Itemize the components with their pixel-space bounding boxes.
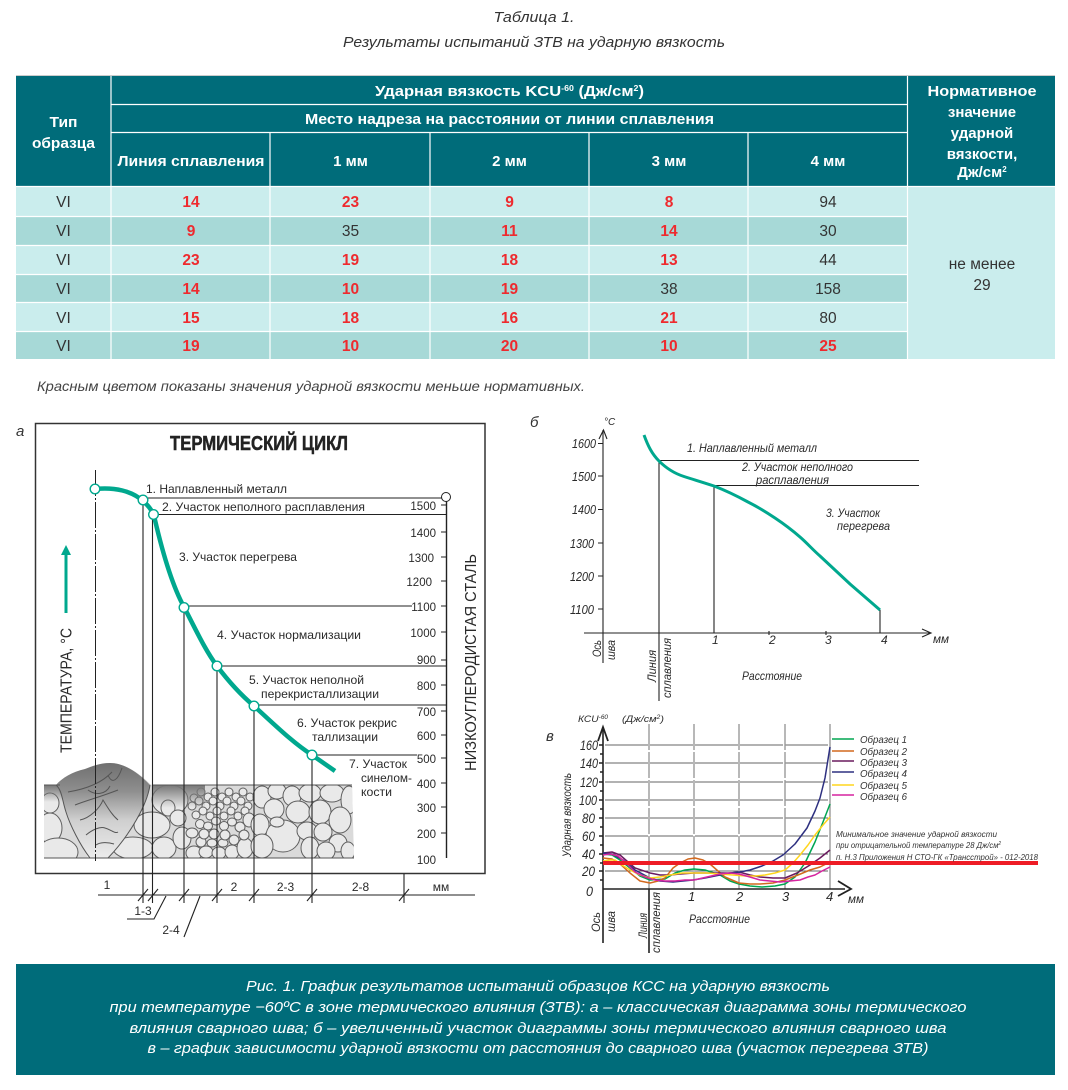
table header: вязкости, [947,146,1017,163]
zone labels: 7. Участок [349,757,408,771]
axis titles: сплавления [649,891,663,953]
table data rows: 8 [665,194,674,211]
table data rows: 10 [342,338,359,355]
table data rows: 16 [501,310,518,327]
temperature scale: 1400 [410,528,436,540]
axis titles: 2 [655,715,661,721]
temperature scale: 1300 [408,553,434,565]
table data rows: 23 [182,252,200,269]
table data rows: 25 [819,338,837,355]
table header: значение [948,104,1016,121]
table data rows: 10 [660,338,678,355]
table data rows: 14 [660,223,678,240]
grid [603,724,830,889]
y tick labels: 60 [582,828,595,844]
caption banner: Рис. 1. График результатов испытаний образцов КСС на ударную вязкость [246,978,830,995]
zone labels: 5. Участок неполной [249,673,364,687]
axis titles: Линия [636,913,650,939]
axis rotated labels: Ось [590,640,604,657]
axis titles: КСU [578,714,597,725]
table header: 2 мм [492,153,527,170]
axis tick labels: 1 [712,633,719,647]
sample 6 [603,854,830,882]
legend: Образец 2 [860,746,907,758]
table header: 2 [1002,165,1007,174]
curve markers [90,484,450,760]
table data rows: 20 [501,338,518,355]
axis arrows [598,727,851,896]
table data rows: VI [56,223,71,240]
temperature scale: 1200 [406,577,432,589]
axis titles: (Дж/см [622,714,652,725]
caption banner: при температуре −60ºС в зоне термического влияния (ЗТВ): а – классическая диаграмма зоны термического [110,999,966,1016]
series curves [603,747,830,887]
zone labels: таллизации [312,730,378,744]
table data rows: не менее [949,256,1015,273]
table header: образца [32,135,96,152]
minimum value note: при отрицательной температуре 28 Дж/см [836,840,1016,850]
table data rows: VI [56,310,71,327]
zone labels: 6. Участок рекрис [297,716,397,730]
table header: Дж/см [957,164,1002,181]
temperature axis label: ТЕМПЕРАТУРА, °С [58,628,76,753]
table data rows: 19 [182,338,200,355]
panel frame [36,424,485,874]
dimension line: мм [433,880,449,894]
minimum value note: Минимальное значение ударной вязкости [836,829,997,839]
table header: 4 мм [811,153,845,170]
table header: Место надреза на расстоянии от линии сплавления [305,111,714,128]
axis titles: мм [848,892,864,906]
zone labels: Расстояние [742,669,802,683]
weld centre axis [94,470,96,861]
temperature scale: 1000 [410,628,436,640]
table data rows: 13 [660,252,678,269]
axis titles: 2 [735,889,744,904]
table header: Ударная вязкость KCU [375,83,544,100]
zone labels: синелом- [361,771,412,785]
y tick labels: 140 [580,755,598,771]
table data rows [56,194,1015,355]
dimension line: 2-8 [352,880,369,894]
table data rows: 18 [501,252,518,269]
y tick labels: 160 [580,737,598,753]
table header: 2 [634,84,639,93]
y tick labels [579,737,598,899]
table header: (Дж/см [574,83,634,100]
panel a: thermal cycle diagram [16,423,485,937]
table data rows: 30 [819,223,837,240]
axis titles: 3 [782,889,790,904]
axis tick labels [570,417,949,647]
dimension line: 1 [104,878,111,892]
zone labels: 3. Участок перегрева [179,550,297,564]
axes and guide lines [584,430,931,701]
axis rotated labels: Линия [645,649,659,683]
low-carbon steel label: НИЗКОУГЛЕРОДИСТАЯ СТАЛЬ [463,554,480,771]
legend: Образец 1 [860,734,907,746]
zone labels: кости [361,785,392,799]
legend: Образец 4 [860,768,907,780]
minimum value note [836,829,1038,862]
zone labels: 2. Участок неполного [741,460,853,474]
table data rows: 14 [182,281,200,298]
axis titles: Ось [589,912,603,932]
table note: Красным цветом показаны значения ударной вязкости меньше нормативных. [37,378,585,394]
zone labels: расплавления [755,473,830,487]
table header [32,83,1036,181]
dimension line: 2 [231,880,238,894]
temperature scale: 700 [417,707,436,719]
table data rows: 38 [660,281,678,298]
temperature scale [406,501,436,867]
legend [832,734,907,803]
zone labels: 1. Наплавленный металл [687,441,817,455]
table header: ударной [951,125,1013,142]
axis tick labels: 1600 [572,436,597,451]
title [343,9,725,51]
table data rows: 9 [505,194,514,211]
table data rows: 19 [501,281,518,298]
table data rows: VI [56,338,71,355]
table header: Тип [50,114,78,131]
axis rotated labels: шва [604,640,618,660]
table header: 3 мм [652,153,686,170]
axis tick labels: °C [604,417,616,428]
table data rows: 35 [342,223,359,240]
temperature scale: 1500 [410,501,436,513]
zone labels [687,441,890,683]
zone labels: перегрева [837,519,890,533]
temperature scale: 500 [417,754,436,766]
temperature scale: 900 [417,655,436,667]
zone labels: 4. Участок нормализации [217,628,361,642]
axis titles [560,714,864,953]
axis tick labels: 1100 [570,602,595,617]
sample 1 [603,804,830,887]
minimum value note: п. Н.3 Приложения Н СТО-ГК «Трансстрой» - 012-2018 [836,852,1038,862]
axis tick labels: 1300 [570,536,595,551]
temperature curve [644,435,880,610]
table header: 1 мм [333,153,368,170]
temperature scale: 1100 [411,602,436,614]
legend: Образец 3 [860,757,907,769]
y tick labels: 20 [581,863,595,879]
axis tick labels: 2 [768,633,776,647]
zone labels: 1. Наплавленный металл [146,482,287,496]
microstructure band [38,763,357,866]
table data rows: 15 [182,310,200,327]
y tick labels: 0 [586,883,593,899]
sample 3 [603,850,830,878]
axis tick labels: 4 [881,633,888,647]
panel letter v: в [546,728,554,745]
thermal curve [95,488,335,771]
axis titles: Расстояние [689,912,750,926]
sample 2 [603,858,830,884]
table header: Линия сплавления [118,153,264,170]
temperature scale: 100 [417,855,436,867]
axis titles: Ударная вязкость [560,773,574,858]
table header: -60 [561,84,575,93]
axis tick labels: 1500 [572,469,597,484]
zone labels: перекристаллизации [261,687,379,701]
table data rows: VI [56,252,71,269]
sample 4 [603,747,830,882]
table data rows: VI [56,194,71,211]
table data rows: 94 [819,194,837,211]
table header: Нормативное [928,83,1036,100]
table data rows: 19 [342,252,359,269]
dimension line: 2-4 [162,923,180,937]
table data rows: 10 [342,281,359,298]
dimension line: 2-3 [277,880,294,894]
axis tick labels: 1200 [570,569,595,584]
table data rows: 80 [819,310,837,327]
title: Таблица 1. [494,9,574,26]
caption banner: в – график зависимости ударной вязкости от расстояния до сварного шва (участок перегрева ЗТВ) [148,1040,928,1057]
panel heading: ТЕРМИЧЕСКИЙ ЦИКЛ [170,431,348,455]
dimension line: 1-3 [134,904,152,918]
table data rows: VI [56,281,71,298]
axis rotated labels [590,637,674,698]
axis titles: ) [659,714,664,725]
zone labels: 2. Участок неполного расплавления [162,500,365,514]
minimum value note: 2 [998,841,1001,847]
axis tick labels: 3 [825,633,832,647]
title: Результаты испытаний ЗТВ на ударную вязкость [343,34,725,51]
panel b: temperature vs distance chart [530,414,949,701]
table data rows: 21 [660,310,678,327]
temperature scale: 800 [417,681,436,693]
panel letter b: б [530,414,539,431]
table data rows: 44 [819,252,837,269]
table data rows: 11 [501,223,518,240]
axis tick labels: мм [933,632,949,646]
caption banner: влияния сварного шва; б – увеличенный участок диаграммы зоны термического влияния сварного шва [130,1020,946,1037]
table: impact toughness results [16,75,1055,359]
dimension line [98,878,475,937]
temperature scale: 200 [417,829,436,841]
vertical temperature arrow [61,545,71,613]
axis titles: 1 [688,889,695,904]
legend: Образец 5 [860,780,907,792]
zone labels: 3. Участок [826,506,881,520]
axes [599,727,845,953]
sample 5 [603,817,830,878]
y tick labels: 120 [580,774,598,790]
axis titles: шва [604,911,618,932]
y tick labels: 100 [579,792,597,808]
axis rotated labels: сплавления [660,637,674,698]
table data rows: 158 [815,281,841,298]
axis titles: 4 [826,889,833,904]
temperature scale: 300 [417,803,436,815]
temperature scale: 600 [417,731,436,743]
axis titles: -60 [599,715,609,721]
zone labels [146,482,412,799]
legend: Образец 6 [860,791,907,803]
axis tick labels: 1400 [572,502,597,517]
panel letter a: а [16,423,24,440]
table data rows: 18 [342,310,359,327]
y tick labels: 40 [582,846,595,862]
temperature scale: 400 [417,779,436,791]
table data rows: 9 [187,223,196,240]
table data rows: 14 [182,194,200,211]
table header: ) [638,83,644,100]
caption banner [16,964,1055,1075]
panel v: impact toughness vs distance chart [546,714,1038,953]
minimum value line [603,861,1038,865]
zone boundary lines [143,498,446,903]
y tick labels: 80 [582,810,595,826]
table data rows: 29 [973,277,991,294]
table data rows: 23 [342,194,359,211]
